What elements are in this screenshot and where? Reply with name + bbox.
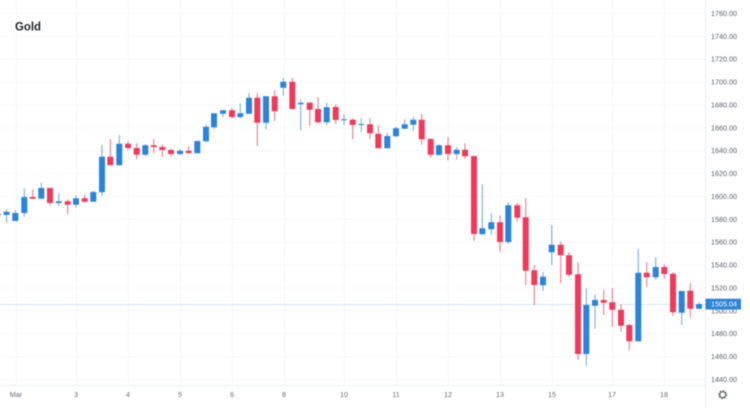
price axis labels: 1540.00 — [711, 261, 737, 270]
candlesticks: falling red candles — [0, 78, 690, 360]
price axis labels — [711, 9, 737, 384]
date axis labels: 6 — [230, 390, 234, 399]
icon: settings gear — [719, 391, 727, 399]
price axis labels: 1620.00 — [711, 169, 737, 178]
price axis labels: 1660.00 — [711, 123, 737, 132]
price axis labels: 1700.00 — [711, 78, 737, 87]
date axis labels: 3 — [74, 390, 78, 399]
current price line — [0, 304, 706, 306]
price axis labels: 1580.00 — [711, 215, 737, 224]
date axis labels — [10, 390, 668, 399]
candlesticks: rising blue candles — [6, 78, 699, 366]
current price tag — [706, 299, 741, 310]
date axis labels: 18 — [660, 390, 668, 399]
price axis labels: 1640.00 — [711, 146, 737, 155]
price axis labels: 1720.00 — [711, 55, 737, 64]
price axis labels: 1740.00 — [711, 32, 737, 41]
date axis labels: 10 — [340, 390, 348, 399]
date axis labels: 12 — [444, 390, 452, 399]
date axis labels: 13 — [496, 390, 504, 399]
price axis labels: 1760.00 — [711, 9, 737, 18]
date axis labels: 8 — [282, 390, 286, 399]
date axis labels: 4 — [126, 390, 130, 399]
date axis labels: 17 — [608, 390, 616, 399]
price axis labels: 1520.00 — [711, 284, 737, 292]
price axis labels: 1460.00 — [711, 352, 737, 361]
date axis labels: Mar — [10, 390, 23, 399]
date axis labels: 5 — [178, 390, 182, 399]
date axis labels: 15 — [548, 390, 556, 399]
current price tag: 1505.04 — [711, 300, 737, 309]
price axis labels: 1560.00 — [711, 238, 737, 247]
price axis labels: 1480.00 — [711, 329, 737, 338]
price axis labels: 1500.00 — [711, 306, 737, 315]
price axis labels: 1440.00 — [711, 375, 737, 384]
price axis labels: 1680.00 — [711, 100, 737, 110]
title: Gold — [15, 20, 41, 34]
date axis labels: 11 — [392, 390, 400, 399]
price axis labels: 1600.00 — [711, 192, 737, 201]
